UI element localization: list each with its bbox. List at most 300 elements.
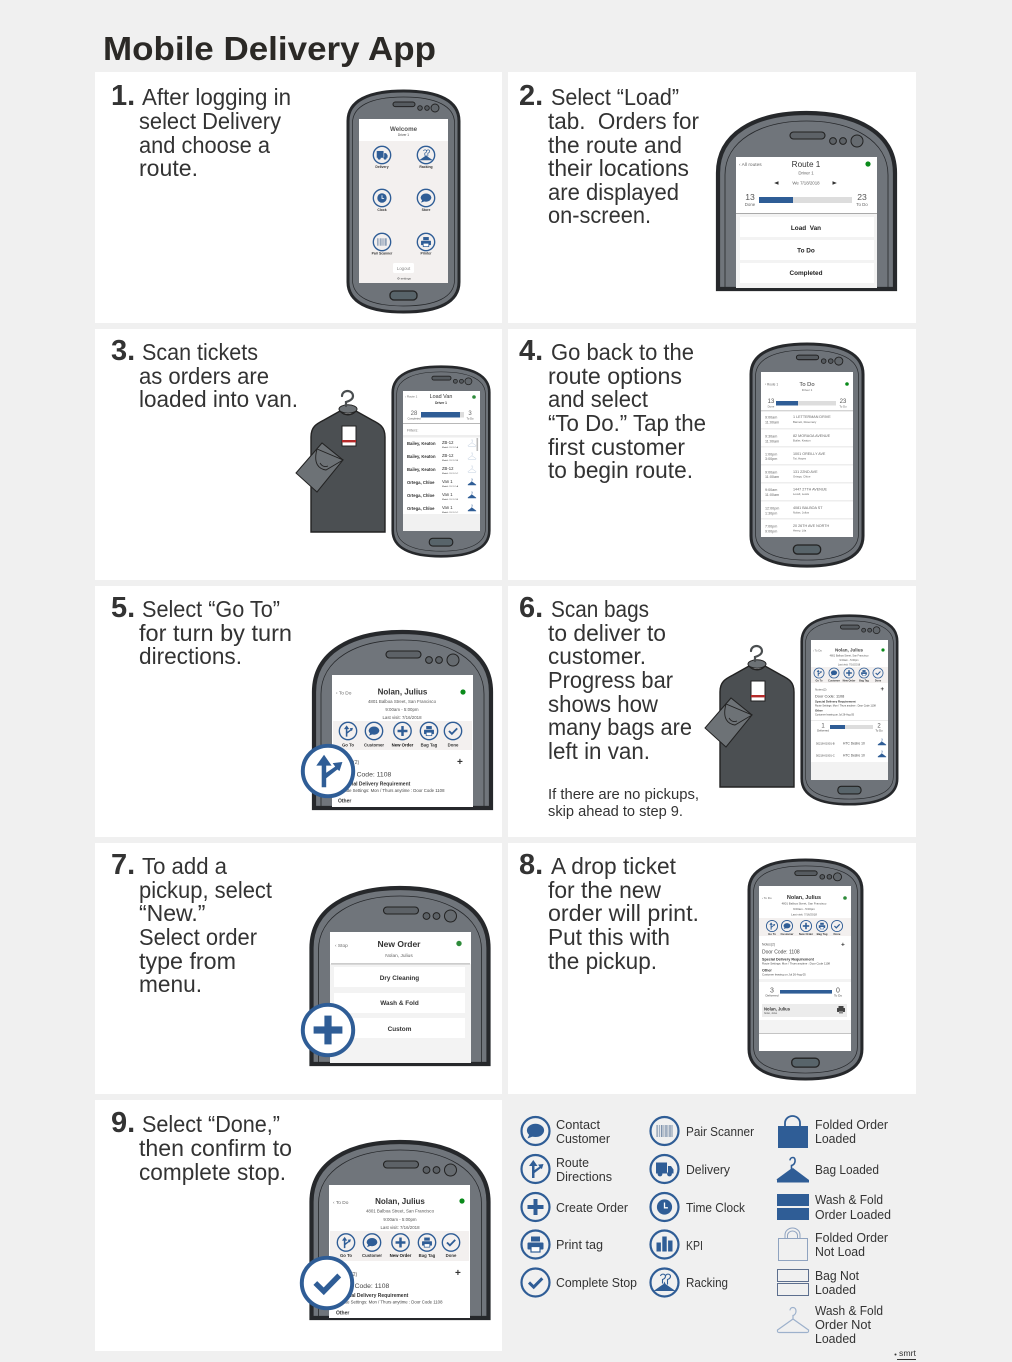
step 7 instruction: “New.” — [139, 900, 205, 926]
phone: load van screen: Bailey, Keaton — [407, 441, 436, 446]
step 4 instruction: first customer — [548, 434, 685, 460]
panel: step 4 — [508, 329, 916, 580]
step 2 instruction: their locations — [548, 155, 689, 181]
step 6 instruction: shows how — [548, 691, 658, 717]
legend icon: contact customer: Customer — [556, 1131, 611, 1146]
phone: welcome screen: Racking — [419, 165, 433, 169]
step 6 instruction: customer. — [548, 643, 646, 669]
phone: welcome screen — [348, 91, 459, 312]
phone: bag progress screen: 4801 Balboa Street, San Francisco — [830, 654, 869, 658]
phone: load van screen: Model ######-A — [442, 485, 459, 488]
legend icon: bag not loaded: Bag Not — [815, 1268, 859, 1283]
phone: load van screen — [393, 367, 489, 556]
phone: to do screen: 13 — [768, 399, 775, 405]
panel: step 7 — [95, 843, 502, 1094]
step 9 instruction — [111, 1107, 292, 1185]
phone: drop ticket screen: Delivered — [765, 994, 779, 998]
phone: drop ticket screen: ‹ To Do — [762, 896, 772, 900]
phone: route screen: We 7/18/2018 — [792, 180, 820, 186]
phone: bag progress screen: 50218-01901-C — [816, 754, 835, 758]
phone: to do screen: ‹ Route 1 — [765, 382, 778, 386]
title: Mobile Delivery App — [103, 31, 436, 68]
phone: to do screen: 20 26TH AVE NORTH — [793, 524, 829, 528]
phone: to do screen: 9:00pm — [765, 530, 777, 534]
legend icon: folded order loaded: Loaded — [815, 1131, 856, 1146]
phone: to do screen: Henry, Lila — [793, 528, 807, 532]
phone: to do screen: 12:00pm — [765, 506, 779, 510]
step 8 instruction: for the new — [548, 877, 661, 903]
step 2 instruction: Select “Load” — [551, 84, 679, 110]
panel background 4 — [508, 329, 916, 580]
phone: load van screen: Van 1 — [442, 479, 453, 484]
legend icon: racking: Racking — [686, 1275, 728, 1290]
step 2 instruction: on-screen. — [548, 202, 651, 228]
step 6 instruction: left in van. — [548, 738, 650, 764]
step 4 instruction: 4. — [519, 335, 543, 367]
step 7 instruction: type from — [139, 948, 236, 974]
phone: to do screen — [751, 344, 863, 566]
phone: drop ticket screen: Special Delivery Requirement — [762, 958, 815, 962]
legend icon: pair scanner: Pair Scanner — [686, 1124, 755, 1139]
phone: to do screen: To Do — [839, 404, 847, 408]
phone: bag progress screen: Notes(2) — [815, 688, 827, 692]
phone: to do screen: 1447 27TH AVENUE — [793, 488, 827, 492]
phone: load van screen: Load Van — [430, 394, 452, 400]
phone: bag progress screen: HTC Desire 10 — [843, 742, 865, 746]
phone: bag progress screen: Route Settings: Mon / Thurs anytime : Door Code 1108 — [815, 704, 876, 708]
phone: load van screen: Model ######-C — [442, 473, 459, 475]
phone: welcome screen: ⚙ settings — [397, 276, 411, 280]
phone: stop detail screen: New Order — [392, 742, 414, 748]
phone: to do screen: 9:00am — [765, 488, 777, 492]
phone: bag progress screen: 9:00am - 5:00pm — [840, 659, 858, 662]
legend icon: contact customer: Contact — [556, 1117, 600, 1132]
phone: complete stop screen: 9:00am - 5:00pm — [383, 1217, 417, 1222]
phone: drop ticket screen: Go To — [768, 932, 776, 936]
step 4 instruction — [519, 335, 706, 483]
phone: load van screen: Van 1 — [442, 505, 453, 510]
phone: to do screen: 1 LETTERMAN DRIVE — [793, 415, 831, 419]
step 6 instruction — [519, 592, 692, 764]
phone: stop detail screen — [314, 632, 491, 808]
step 7 instruction: pickup, select — [139, 877, 273, 903]
step 2 instruction: 2. — [519, 80, 543, 112]
legend icon: kpi — [650, 1230, 703, 1258]
phone: welcome screen: Clock — [377, 208, 387, 212]
phone: to do screen: Done — [768, 404, 775, 408]
phone: complete stop screen — [312, 1142, 488, 1318]
phone: bag progress screen: Customer leaving on Jul 26-Aug 05 — [815, 714, 855, 716]
step 6 note: skip ahead to step 9. — [548, 804, 683, 820]
step 7 instruction: Select order — [139, 924, 257, 950]
panel: step 1 — [95, 72, 502, 323]
phone: new order screen: Dry Cleaning — [380, 975, 419, 982]
phone: new order screen: ‹ Stop — [335, 943, 348, 949]
legend icon: delivery — [650, 1155, 730, 1183]
step 3 instruction: 3. — [111, 335, 135, 367]
panel background 6 — [508, 586, 916, 837]
panel background 8 — [508, 843, 916, 1094]
legend icon: wash and fold order loaded: Order Loaded — [815, 1207, 891, 1222]
phone: drop ticket screen: Notes(2) — [762, 942, 775, 946]
legend icon: folded order loaded — [778, 1116, 889, 1148]
phone: drop ticket screen: Customer — [780, 932, 794, 936]
legend icon: route directions — [522, 1155, 612, 1184]
phone: drop ticket screen: Door Code: 1108 — [762, 950, 800, 956]
phone: stop detail screen: ‹ To Do — [336, 690, 352, 696]
phone: new order screen: New Order — [378, 939, 421, 949]
phone: stop detail screen: Last visit: 7/16/2018 — [382, 715, 422, 720]
step 9 instruction: complete stop. — [139, 1159, 286, 1185]
phone: load van screen: Model ######-B — [442, 460, 459, 462]
icon: complete stop callout — [302, 1258, 352, 1308]
phone: stop detail screen: Done — [448, 742, 459, 748]
panel: step 5 — [95, 586, 502, 837]
footer logo: smrt — [899, 1349, 917, 1358]
legend icon: kpi: KPI — [686, 1238, 703, 1253]
legend icon: wash and fold order loaded — [777, 1192, 891, 1222]
phone: welcome screen: Pair Scanner — [372, 252, 393, 256]
phone: drop ticket screen: 3 — [770, 988, 774, 994]
phone: load van screen: To Do — [466, 416, 474, 420]
step 2 instruction: tab. Orders for — [548, 108, 699, 134]
phone: route screen: 13 — [745, 192, 755, 202]
phone: bag progress screen: 50218-01901-B — [816, 742, 835, 746]
phone: complete stop screen: Bag Tag — [419, 1253, 436, 1258]
phone: stop detail screen: Notes(2) — [340, 760, 360, 766]
step 8 instruction: A drop ticket — [551, 853, 677, 879]
legend icon: wash and fold order not loaded — [777, 1303, 883, 1346]
phone: stop detail screen: Customer — [364, 742, 384, 748]
step 1 instruction: After logging in — [142, 84, 291, 110]
step 1 instruction: route. — [139, 155, 198, 181]
panel background 5 — [95, 586, 502, 837]
legend icon: wash and fold order loaded: Wash & Fold — [815, 1192, 883, 1207]
phone: to do screen: 4081 BALBOA ST — [793, 506, 823, 510]
phone: stop detail screen: Nolan, Julius — [378, 688, 428, 696]
step 5 instruction: for turn by turn — [139, 620, 292, 646]
legend icon: bag not loaded — [778, 1268, 859, 1297]
phone: drop ticket screen: New Order — [799, 932, 814, 936]
step 8 instruction: Put this with — [548, 924, 670, 950]
phone: stop detail screen: Go To — [342, 742, 354, 748]
step 3 instruction: loaded into van. — [139, 386, 298, 412]
legend icon: time clock — [650, 1193, 745, 1221]
phone: load van screen: Model ######-A — [442, 446, 459, 449]
icon: create order callout — [303, 1005, 353, 1055]
phone: complete stop screen: Other — [336, 1310, 349, 1316]
phone: drop ticket screen: To Do — [834, 994, 842, 998]
step 5 instruction: directions. — [139, 643, 242, 669]
step 7 instruction — [111, 849, 273, 997]
phone: stop detail screen: + — [457, 757, 463, 768]
phone: stop detail screen: Bag Tag — [421, 742, 438, 748]
phone: load van screen: 3 — [468, 411, 472, 417]
phone: drop ticket screen: + — [841, 942, 845, 948]
phone: bag progress screen: Delivered — [817, 728, 829, 732]
phone: to do screen: Nolan, Julius — [793, 510, 810, 514]
step 5 instruction — [111, 592, 292, 669]
panel: step 3 — [95, 329, 502, 580]
phone: to do screen: 9:00am — [765, 416, 777, 420]
phone: route screen: Load Van — [791, 225, 821, 232]
phone: drop ticket screen: Bag Tag — [817, 932, 828, 936]
phone: bag progress screen: HTC Desire 10 — [843, 754, 865, 758]
panel: step 8 — [508, 843, 916, 1094]
panel background 2 — [508, 72, 916, 323]
step 8 instruction: 8. — [519, 849, 543, 881]
phone: to do screen: Ortega, Chloe — [793, 474, 811, 478]
step 6 instruction: 6. — [519, 592, 543, 624]
phone: complete stop screen: Last visit: 7/16/2018 — [380, 1225, 420, 1230]
phone: new order screen — [312, 888, 488, 1064]
phone: bag progress screen: Last visit: 7/16/2018 — [838, 664, 861, 666]
phone: drop ticket screen: Done — [834, 932, 841, 936]
phone: complete stop screen: ‹ To Do — [333, 1200, 349, 1206]
phone: to do screen: 23 — [840, 399, 847, 405]
step 4 instruction: “To Do.” Tap the — [548, 410, 706, 436]
phone: stop detail screen: Door Code: 1108 — [340, 772, 391, 778]
step 1 instruction: select Delivery — [139, 108, 281, 134]
phone: drop ticket screen: 9:00am - 5:00pm — [793, 907, 816, 911]
phone: bag progress screen: Bag Tag — [859, 680, 869, 682]
phone: to do screen: 9:00am — [765, 470, 777, 474]
phone: complete stop screen: 4801 Balboa Street, San Francisco — [366, 1208, 435, 1214]
panel background 9 — [95, 1100, 502, 1351]
phone: route screen: ‹ All routes — [739, 162, 762, 168]
step 8 instruction — [519, 849, 699, 974]
step 6 instruction: Progress bar — [548, 667, 673, 693]
phone: complete stop screen: Go To — [340, 1253, 352, 1258]
phone: route screen: To Do — [797, 248, 815, 254]
phone: to do screen: Lovell, Lewis — [793, 492, 810, 496]
legend icon: complete stop: Complete Stop — [556, 1275, 637, 1290]
phone: load van screen: Van 1 — [442, 492, 453, 497]
panel: step 6 — [508, 586, 916, 837]
legend icon: delivery: Delivery — [686, 1162, 730, 1177]
phone: bag progress screen: Door Code: 1108 — [815, 694, 844, 698]
phone: route screen: To Do — [856, 202, 868, 207]
phone: to do screen: 131 22ND AVE — [793, 470, 818, 474]
phone: route screen: Driver 1 — [798, 170, 814, 176]
phone: to do screen: 11:00am — [765, 475, 779, 479]
phone: drop ticket screen: Route Settings: Mon / Thurs anytime : Door Code 1108 — [762, 962, 830, 966]
phone: new order screen: Custom — [388, 1026, 412, 1033]
legend — [522, 1116, 891, 1346]
phone: to do screen: 82 MORAGA AVENUE — [793, 434, 831, 438]
panel background 3 — [95, 329, 502, 580]
phone: load van screen: Bailey, Keaton — [407, 454, 436, 459]
phone: stop detail screen: Route Settings: Mon / Thurs anytime : Door Code 1108 — [340, 788, 445, 793]
step 7 instruction: To add a — [142, 853, 227, 879]
phone: bag progress screen: ‹ To Do — [813, 648, 822, 652]
phone: bag progress screen: + — [880, 687, 884, 693]
legend icon: print tag — [522, 1230, 603, 1258]
step 6 instruction: many bags are — [548, 714, 692, 740]
phone: stop detail screen: Other — [338, 798, 351, 804]
panel background 1 — [95, 72, 502, 323]
phone: to do screen: 7:00pm — [765, 524, 777, 528]
phone: complete stop screen: Door Code: 1108 — [338, 1283, 389, 1290]
step 5 instruction: Select “Go To” — [142, 596, 280, 622]
phone: bag progress screen: Customer — [828, 680, 840, 682]
garment bag with scanner — [705, 646, 794, 787]
phone: drop ticket screen: Nolan, Julius — [787, 895, 821, 901]
phone: bag progress screen: Nolan, Julius — [835, 648, 863, 652]
phone: load van screen: Filters: — [407, 428, 418, 432]
legend icon: create order — [522, 1193, 629, 1221]
step 9 instruction: Select “Done,” — [142, 1111, 280, 1137]
step 6 instruction: to deliver to — [548, 620, 666, 646]
phone: load van screen: ZB-12 — [442, 453, 454, 458]
phone: drop ticket screen: Nolan, Julius — [764, 1006, 791, 1012]
step 4 instruction: and select — [548, 386, 649, 412]
legend icon: route directions: Directions — [556, 1169, 612, 1184]
phone: bag progress screen: Special Delivery Requirement — [815, 700, 856, 704]
step 4 instruction: Go back to the — [551, 339, 694, 365]
legend icon: racking — [650, 1268, 728, 1296]
phone: load van screen: Completed — [408, 416, 421, 420]
phone: to do screen: Butler, Keaton — [793, 438, 811, 442]
step 1 instruction: 1. — [111, 80, 135, 112]
phone: complete stop screen: Special Delivery Requirement — [338, 1293, 409, 1299]
step 7 instruction: 7. — [111, 849, 135, 881]
legend icon: wash and fold order not loaded: Wash & Fold — [815, 1303, 883, 1318]
legend icon: bag loaded — [777, 1158, 879, 1182]
phone: route screen — [718, 113, 895, 289]
legend icon: complete stop — [522, 1268, 637, 1296]
legend icon: time clock: Time Clock — [686, 1200, 745, 1215]
phone: drop ticket screen: 4801 Balboa Street, San Francisco — [782, 902, 827, 906]
phone: load van screen: ZB-12 — [442, 466, 454, 471]
phone: welcome screen: Driver 1 — [398, 133, 409, 137]
phone: stop detail screen: 4801 Balboa Street, San Francisco — [368, 699, 437, 704]
phone: to do screen: 1001 OREILLY AVE — [793, 452, 826, 456]
phone: complete stop screen: Nolan, Julius — [375, 1197, 425, 1206]
panel: step 2 — [508, 72, 916, 323]
phone: route screen: 23 — [857, 192, 867, 202]
phone: bag progress screen — [802, 616, 897, 804]
garment bag with scanner — [296, 391, 385, 532]
step 9 instruction: then confirm to — [139, 1135, 292, 1161]
legend icon: folded order not loaded: Folded Order — [815, 1230, 889, 1245]
phone: load van screen: Model ######-C — [442, 512, 459, 514]
phone: to do screen: 11:00am — [765, 420, 779, 424]
phone: to do screen: 11:00am — [765, 493, 779, 497]
phone: bag progress screen: 1 — [821, 724, 825, 730]
phone: to do screen: 1:30pm — [765, 512, 777, 516]
step 7 instruction: menu. — [139, 971, 202, 997]
legend icon: folded order not loaded: Not Load — [815, 1244, 865, 1259]
phone: to do screen: 1:00pm — [765, 452, 777, 456]
phone: drop ticket screen: Last visit: 7/16/2018 — [791, 912, 817, 916]
phone: drop ticket screen: Customer leaving on Jul 26-Aug 05 — [762, 972, 806, 976]
legend icon: pair scanner — [650, 1117, 755, 1145]
footer logo — [894, 1349, 917, 1360]
phone: load van screen: Ortega, Chloe — [407, 480, 435, 485]
step 6 instruction: Scan bags — [551, 596, 649, 622]
step 8 instruction: the pickup. — [548, 948, 657, 974]
phone: welcome screen: Delivery — [375, 165, 389, 169]
step 3 instruction: as orders are — [139, 363, 269, 389]
phone: route screen: Route 1 — [792, 160, 821, 169]
phone: new order screen: Nolan, Julius — [385, 953, 413, 959]
phone: drop ticket screen: Nolan, Julius — [764, 1013, 778, 1015]
legend icon: folded order not loaded — [778, 1228, 889, 1260]
phone: stop detail screen: 9:00am - 5:00pm — [385, 707, 419, 712]
phone: to do screen: Driver 1 — [802, 388, 813, 392]
step 9 instruction: 9. — [111, 1107, 135, 1139]
legend icon: bag loaded: Bag Loaded — [815, 1162, 879, 1177]
phone: bag progress screen: Done — [875, 680, 882, 682]
step 3 instruction — [111, 335, 298, 412]
legend icon: bag not loaded: Loaded — [815, 1282, 856, 1297]
phone: bag progress screen: Go To — [815, 680, 823, 682]
legend icon: route directions: Route — [556, 1155, 589, 1170]
phone: route screen: Done — [745, 202, 756, 207]
phone: to do screen: 3:00pm — [765, 457, 777, 461]
phone: complete stop screen: Done — [446, 1253, 457, 1258]
phone: welcome screen: Welcome — [390, 126, 418, 133]
phone: load van screen: 28 — [411, 411, 418, 417]
phone: load van screen: Ortega, Chloe — [407, 506, 435, 511]
phone: load van screen: Model ######-B — [442, 499, 459, 501]
phone: load van screen: Bailey, Keaton — [407, 467, 436, 472]
step 5 instruction: 5. — [111, 592, 135, 624]
phone: load van screen: Driver 1 — [435, 401, 447, 405]
phone: to do screen: Tai, Hayes — [793, 456, 807, 460]
phone: to do screen: Barnett, Rosemary — [793, 420, 817, 424]
legend icon: wash and fold order not loaded: Loaded — [815, 1331, 856, 1346]
phone: load van screen: ZB-12 — [442, 440, 454, 445]
phone: complete stop screen: New Order — [390, 1253, 412, 1258]
legend icon: wash and fold order not loaded: Order Not — [815, 1317, 871, 1332]
phone: complete stop screen: Customer — [362, 1253, 382, 1258]
legend icon: print tag: Print tag — [556, 1237, 603, 1252]
phone: bag progress screen: Other — [815, 708, 824, 712]
phone: complete stop screen: + — [455, 1268, 461, 1279]
phone: welcome screen: Store — [422, 208, 430, 212]
step 2 instruction: are displayed — [548, 179, 679, 205]
phone: to do screen: 9:30am — [765, 434, 777, 438]
phone: complete stop screen: Notes(2) — [338, 1272, 358, 1278]
step 4 instruction: route options — [548, 363, 682, 389]
phone: complete stop screen: Route Settings: Mon / Thurs anytime : Door Code 1108 — [338, 1300, 443, 1304]
phone: drop ticket screen: 0 — [836, 988, 840, 994]
phone: stop detail screen: Special Delivery Requirement — [340, 782, 411, 788]
step 6 note — [548, 787, 699, 820]
panel: step 9 — [95, 1100, 502, 1351]
phone: welcome screen: Printer — [421, 252, 432, 256]
step 8 instruction: order will print. — [548, 900, 699, 926]
legend icon: folded order loaded: Folded Order — [815, 1117, 889, 1132]
step 2 instruction: the route and — [548, 132, 682, 158]
phone: welcome screen: Logout — [397, 266, 411, 271]
panel background 7 — [95, 843, 502, 1094]
legend icon: contact customer — [522, 1117, 611, 1146]
phone: bag progress screen: To Do — [875, 728, 883, 732]
phone: load van screen: Ortega, Chloe — [407, 493, 435, 498]
legend icon: create order: Create Order — [556, 1200, 629, 1215]
step 3 instruction: Scan tickets — [142, 339, 258, 365]
step 2 instruction — [519, 80, 699, 228]
phone: new order screen: Wash & Fold — [380, 1000, 419, 1007]
phone: bag progress screen: 2 — [877, 724, 881, 730]
phone: to do screen: To Do — [799, 382, 815, 388]
icon: route directions callout — [303, 746, 353, 796]
step 1 instruction — [111, 80, 291, 181]
phone: drop ticket screen: Other — [762, 968, 772, 972]
